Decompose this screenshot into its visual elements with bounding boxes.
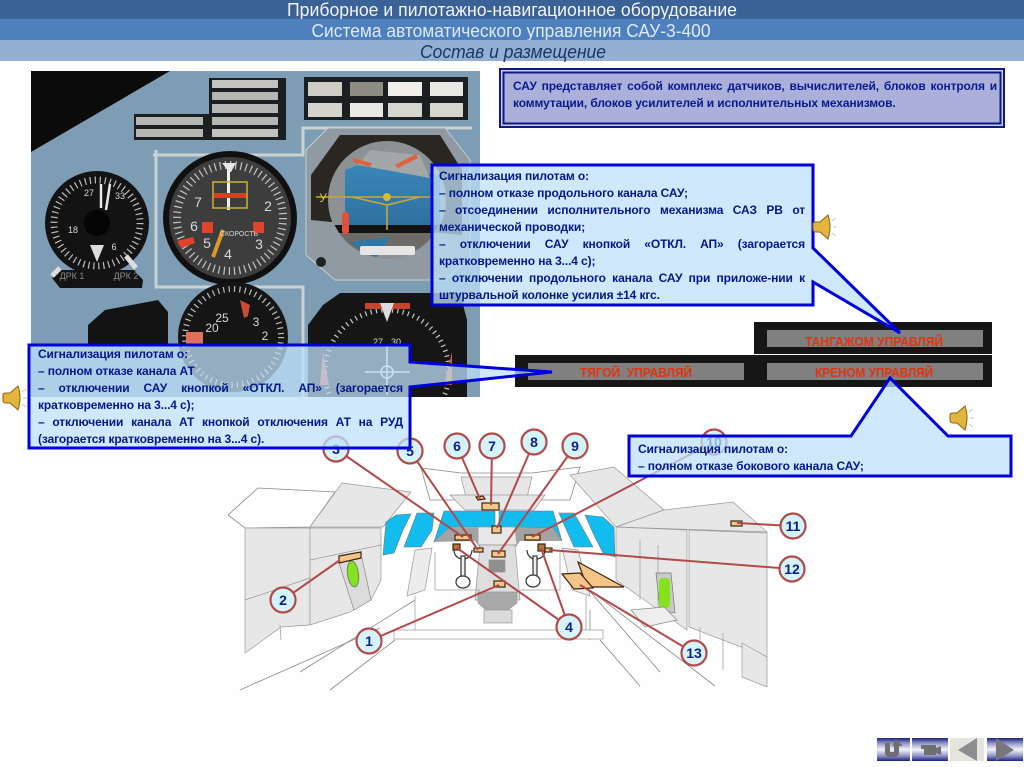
gauge: course indicator: 27 (84, 188, 94, 198)
gauge: speed indicator: СКОРОСТЬ (220, 231, 258, 238)
navigation button: previous (950, 738, 984, 761)
gauge: navigation indicator: 30 (391, 337, 401, 347)
gauge: speed indicator: 3 (255, 236, 263, 252)
gauge: speed indicator: 5 (203, 235, 211, 251)
gauge: speed indicator: 7 (194, 194, 202, 210)
callout: thrust channel signalling: – полном отказе канала АТ (38, 364, 195, 378)
main instrument panel (434, 527, 562, 548)
gauge: navigation indicator: 27 (373, 337, 383, 347)
numbered markers: 5 (406, 443, 414, 459)
gauge: course indicator (45, 171, 149, 288)
callout: thrust channel signalling: – отключении САУ кнопкой «ОТКЛ. АП» (загорается (38, 381, 403, 395)
gauge: course indicator: ДРК 1 (60, 271, 84, 281)
left control column (454, 550, 472, 588)
icon: speaker above roll callout (950, 405, 974, 431)
gauge: attitude indicator: У (319, 191, 327, 205)
callout: thrust channel signalling: (загорается кратковременно на 3...4 с). (38, 432, 264, 446)
gauge: attitude indicator (306, 128, 470, 280)
warning lamp: roll: КРЕНОМ УПРАВЛЯЙ (815, 365, 933, 380)
gauge: lower round instrument: 25 (215, 311, 229, 325)
aircraft cabin diagram (228, 430, 806, 690)
cockpit windows (383, 511, 615, 557)
gauge: navigation indicator (308, 293, 467, 397)
numbered markers: 13 (686, 645, 702, 661)
gauge: lower round instrument: 20 (205, 321, 219, 335)
black square housing (88, 300, 168, 345)
gauge: speed indicator: 6 (190, 218, 198, 234)
right door with green window (631, 573, 677, 627)
callout: roll channel signalling: – полном отказе бокового канала САУ; (638, 459, 864, 473)
numbered markers: 9 (571, 438, 579, 454)
gauge: lower round instrument: 2 (262, 329, 269, 343)
numbered markers: 7 (488, 438, 496, 454)
numbered markers: 2 (279, 592, 287, 608)
gauge: course indicator: ДРК 2 (114, 271, 138, 281)
left door with green window (339, 558, 371, 610)
gauge: lower round instrument (178, 282, 288, 392)
callout: pitch channel signalling: Сигнализация пилотам о: (439, 169, 589, 183)
callout: thrust channel signalling: – отключении канала АТ кнопкой отключения АТ на РУД (38, 415, 403, 429)
numbered markers: 1 (365, 633, 373, 649)
warning lamp: thrust (515, 355, 751, 387)
numbered markers: 6 (453, 438, 461, 454)
cockpit instrument panel photo (31, 71, 480, 397)
leader lines (283, 442, 793, 653)
callout: pitch channel signalling: механической проводки; (439, 220, 585, 234)
center pedestal and seats (394, 527, 603, 639)
numbered markers (270, 430, 806, 666)
info box: SAU definition: САУ представляет собой комплекс датчиков, вычислителей, блоков контроля и (513, 79, 997, 93)
numbered markers: 10 (706, 434, 722, 450)
warning lamp: thrust: ТЯГОЙ УПРАВЛЯЙ (580, 365, 692, 380)
callout: pitch channel signalling: – отсоединении исполнительного механизма САЗ РВ от (439, 203, 805, 217)
header: system band: Система автоматического управления САУ-3-400 (312, 21, 710, 41)
callout: pitch channel signalling: штурвальной колонке усилия ±14 кгс. (439, 288, 660, 302)
navigation button: next (987, 738, 1023, 761)
header: section band: Состав и размещение (420, 42, 606, 62)
right control column (526, 550, 545, 587)
equipment blocks (339, 496, 742, 589)
gauge: speed indicator (163, 151, 297, 285)
numbered markers: 3 (332, 441, 340, 457)
icon: speaker left of thrust callout (2, 385, 27, 411)
numbered markers: 12 (784, 561, 800, 577)
callout: pitch channel signalling: – полном отказе продольного канала САУ; (439, 186, 688, 200)
header: section band (0, 40, 1024, 62)
numbered markers: 8 (530, 434, 538, 450)
callout: pitch channel signalling: – отключении продольного канала САУ при приложе-нии к (439, 271, 805, 285)
gauge: course indicator: 18 (68, 225, 78, 235)
callout: pitch channel signalling: – отключении САУ кнопкой «ОТКЛ. АП» (загорается (439, 237, 805, 251)
gauge: speed indicator: 4 (224, 246, 232, 262)
gauge: lower round instrument: 3 (253, 315, 260, 329)
gauge: speed indicator: 2 (264, 198, 272, 214)
callout: roll channel signalling: Сигнализация пилотам о: (638, 442, 788, 456)
header: title band: Приборное и пилотажно-навигационное оборудование (287, 0, 737, 20)
navigation button: camera (912, 738, 948, 761)
header: title band (0, 0, 1024, 20)
header: system band (0, 19, 1024, 41)
indicator lamp rows (134, 77, 468, 140)
warning lamp: pitch: ТАНГАЖОМ УПРАВЛЯЙ (805, 334, 943, 349)
warning lamp: roll (751, 355, 992, 387)
info box: SAU definition (499, 68, 1005, 128)
numbered markers: 4 (565, 619, 573, 635)
warning lamp: pitch (754, 322, 992, 354)
navigation button: return (877, 738, 910, 761)
gauge: course indicator: 6 (111, 242, 117, 252)
numbered markers: 11 (786, 518, 801, 534)
icon: speaker right of pitch callout (812, 214, 837, 240)
callout: thrust channel signalling: кратковременно на 3...4 с); (38, 398, 194, 412)
info box: SAU definition: коммутации, блоков усилителей и исполнительных механизмов. (513, 96, 896, 110)
gauge: course indicator: 33 (115, 191, 125, 201)
callout: pitch channel signalling: кратковременно на 3...4 с); (439, 254, 595, 268)
callout: thrust channel signalling: Сигнализация пилотам о: (38, 347, 188, 361)
